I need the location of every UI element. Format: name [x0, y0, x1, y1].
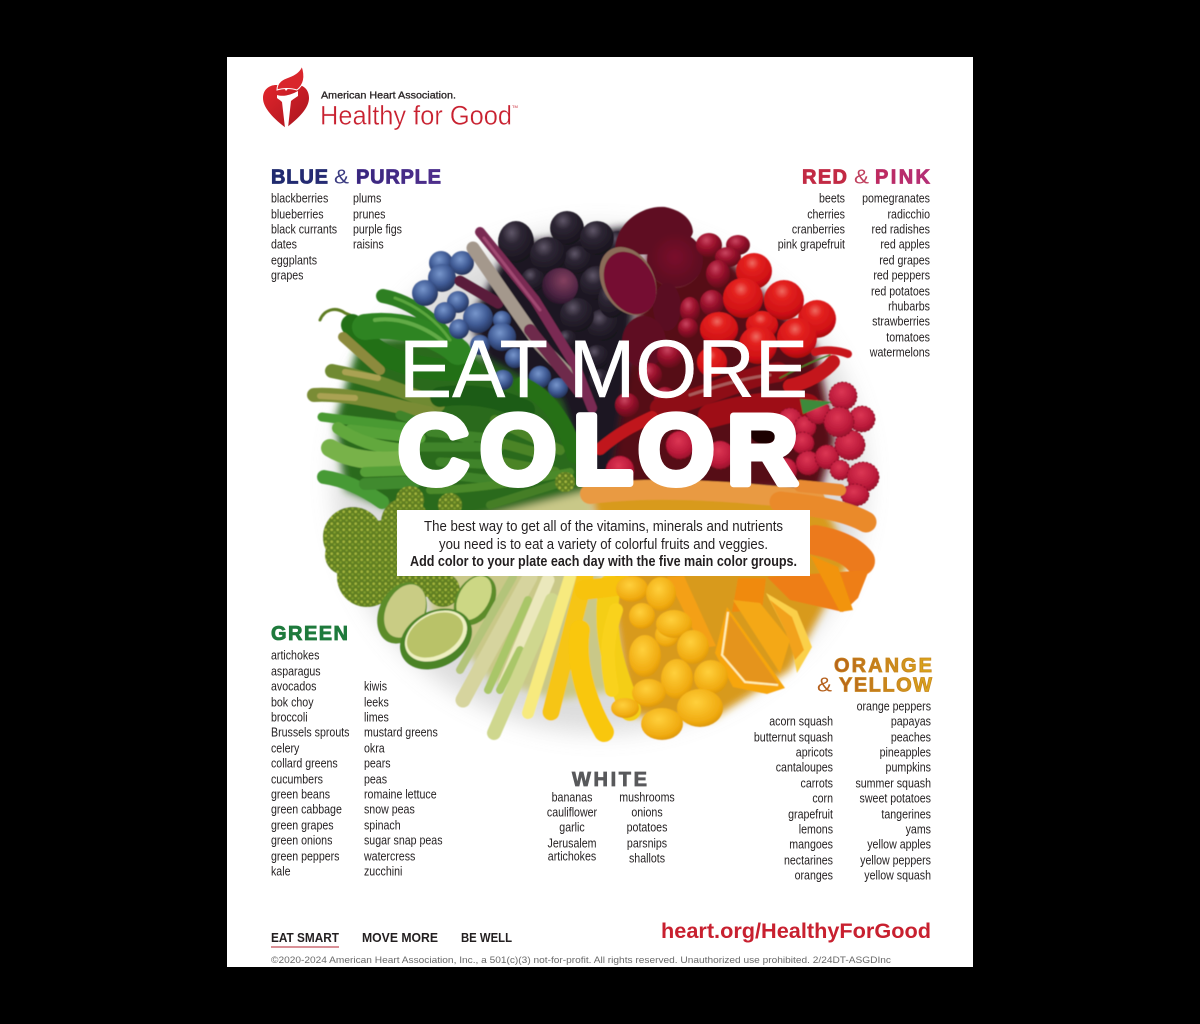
list column 2: sugar snap peas — [364, 834, 443, 848]
logo: American Heart Association Healthy for Good — [263, 66, 518, 130]
list column 1: green grapes — [271, 819, 334, 833]
intro line 2: you need is to eat a variety of colorful fruits and veggies. — [439, 537, 768, 553]
carrots — [590, 486, 866, 561]
list column 2: pumpkins — [886, 761, 931, 775]
panel: green list — [271, 623, 443, 879]
list column 1 — [754, 715, 834, 883]
list column 2: watercress — [363, 850, 416, 864]
list column 2: romaine lettuce — [364, 788, 437, 802]
list column 2: pears — [364, 757, 391, 771]
copyright: ©2020-2024 American Heart Association, Inc., a 501(c)(3) not-for-profit. All rights reserved. Unauthorized use prohibited. 2/24DT-ASGDInc — [271, 955, 891, 966]
panel: blue and purple list — [271, 166, 441, 283]
intro line 3: Add color to your plate each day with the five main color groups. — [410, 554, 797, 570]
list column 1: apricots — [796, 746, 833, 760]
list column 1: green peppers — [271, 850, 340, 864]
list column 2: tomatoes — [886, 331, 930, 345]
list column 1: blueberries — [271, 208, 324, 222]
list column 2: red potatoes — [871, 285, 930, 299]
list column 1: cranberries — [792, 223, 845, 237]
list column 2: tangerines — [881, 808, 931, 822]
list column 2: potatoes — [627, 821, 668, 835]
heading: PINK — [875, 166, 931, 188]
list column 2: spinach — [364, 819, 401, 833]
list column 2: leeks — [364, 696, 389, 710]
footer nav: eat smart: EAT SMART — [271, 931, 339, 945]
footer nav: be well: BE WELL — [461, 931, 512, 945]
raspberry leaf — [800, 399, 832, 414]
dark base colours — [335, 225, 850, 720]
heading: & — [817, 674, 833, 696]
list column 1 — [271, 649, 350, 879]
footer — [271, 920, 931, 966]
panel: white list — [547, 769, 675, 866]
dark gap behind the R — [750, 422, 778, 444]
active underline — [271, 946, 339, 948]
list column 1: green beans — [271, 788, 330, 802]
list column 2: okra — [364, 742, 385, 756]
list column 2: rhubarbs — [888, 300, 930, 314]
cherries and cranberries — [615, 233, 750, 417]
list column 1: cucumbers — [271, 773, 323, 787]
heading: WHITE — [572, 769, 647, 791]
list column 1: cauliflower — [547, 806, 597, 820]
green beans and snap peas — [322, 385, 575, 505]
list column 1: artichokes — [548, 850, 596, 864]
list column 1: broccoli — [271, 711, 308, 725]
list column 1: artichokes — [271, 649, 320, 663]
list column 2: red peppers — [873, 269, 930, 283]
purple plum accent — [542, 268, 578, 304]
list column 2: peaches — [891, 731, 931, 745]
heading: ORANGE — [834, 655, 932, 677]
list column 1: mangoes — [789, 838, 833, 852]
list column 2: orange peppers — [857, 700, 931, 714]
title line 2: COLOR — [398, 394, 798, 504]
list column 1: celery — [271, 742, 300, 756]
list column 1: asparagus — [271, 665, 321, 679]
list column 2: zucchini — [364, 865, 402, 879]
list column 1: garlic — [559, 821, 585, 835]
list column 2: summer squash — [855, 777, 931, 791]
list column 1: green onions — [271, 834, 333, 848]
list column 1: pink grapefruit — [778, 238, 846, 252]
list column 1: nectarines — [784, 854, 833, 868]
list column 2: mushrooms — [619, 791, 675, 805]
list column 2: yellow apples — [867, 838, 931, 852]
footer nav: move more: MOVE MORE — [362, 931, 438, 945]
heading — [817, 655, 932, 696]
list column 1: Jerusalem — [548, 837, 596, 851]
leeks and yellow bean sticks — [460, 577, 630, 733]
website url: heart.org/HealthyForGood — [661, 920, 931, 943]
list column 1: grapes — [271, 269, 304, 283]
list column 2: red apples — [880, 238, 930, 252]
heading: & — [334, 166, 350, 188]
list column 2: raisins — [353, 238, 384, 252]
plums — [498, 211, 632, 391]
oranges — [667, 576, 812, 694]
list column 2: yellow peppers — [860, 854, 931, 868]
intro text box — [397, 510, 810, 576]
list column 1: eggplants — [271, 254, 317, 268]
list column 2 — [862, 192, 930, 360]
food color wheel illustration — [314, 207, 879, 740]
list column 1: black currants — [271, 223, 337, 237]
heading — [802, 166, 931, 188]
list column 2: mustard greens — [364, 726, 438, 740]
list column 2: prunes — [353, 208, 386, 222]
list column 1: kale — [271, 865, 290, 879]
list column 2: radicchio — [887, 208, 930, 222]
heading: & — [854, 166, 870, 188]
list column 2 — [855, 700, 931, 883]
list column 1: avocados — [271, 680, 317, 694]
tomatoes — [697, 253, 836, 377]
list column 2 — [353, 192, 402, 252]
list column 2: yellow squash — [864, 869, 931, 883]
list column 1: cherries — [807, 208, 845, 222]
list column 2: pineapples — [880, 746, 931, 760]
list column 1: blackberries — [271, 192, 328, 206]
list column 1: Brussels sprouts — [271, 726, 350, 740]
list column 1: green cabbage — [271, 803, 342, 817]
list column 1 — [778, 192, 846, 252]
brand name: Healthy for Good — [320, 100, 512, 130]
icon: heart and torch — [263, 66, 309, 128]
list column 1: lemons — [799, 823, 833, 837]
heading: YELLOW — [839, 674, 932, 696]
heading — [271, 166, 441, 188]
list column 2 — [619, 791, 675, 866]
list column 1: bananas — [552, 791, 593, 805]
limes — [368, 567, 505, 682]
list column 2: parsnips — [627, 837, 667, 851]
list column 2: snow peas — [364, 803, 415, 817]
list column 2: shallots — [629, 852, 665, 866]
page background — [227, 57, 973, 967]
list column 1: grapefruit — [788, 808, 834, 822]
heading: RED — [802, 166, 847, 188]
list column 1 — [547, 791, 597, 864]
list column 2: red grapes — [879, 254, 930, 268]
list column 2: limes — [364, 711, 389, 725]
list column 2: kiwis — [364, 680, 387, 694]
heading: BLUE — [271, 166, 328, 188]
list column 1: acorn squash — [769, 715, 833, 729]
heading: PURPLE — [356, 166, 441, 188]
red peppers — [600, 350, 848, 449]
blueberries — [412, 251, 568, 398]
list column 1: cantaloupes — [776, 761, 833, 775]
list column 2: pomegranates — [862, 192, 930, 206]
intro line 1: The best way to get all of the vitamins, minerals and nutrients — [424, 519, 783, 535]
list column 1: carrots — [801, 777, 833, 791]
list column 1 — [271, 192, 337, 283]
list column 2: sweet potatoes — [860, 792, 931, 806]
list column 2: strawberries — [872, 315, 930, 329]
list column 2: plums — [353, 192, 382, 206]
kumquats — [611, 576, 728, 740]
list column 1: oranges — [795, 869, 833, 883]
list column 1: beets — [819, 192, 845, 206]
list column 1: collard greens — [271, 757, 338, 771]
broccoli — [323, 472, 575, 610]
list column 2: onions — [631, 806, 663, 820]
title line 1: EAT MORE — [399, 324, 808, 415]
asparagus — [314, 337, 438, 413]
list column 2: watermelons — [869, 346, 930, 360]
heading: GREEN — [271, 623, 348, 645]
organization name: American Heart Association. — [321, 90, 456, 102]
panel: orange and yellow list — [754, 655, 932, 883]
soft shadow — [335, 228, 865, 732]
list column 1: corn — [812, 792, 833, 806]
list column 2 — [363, 680, 443, 879]
list column 1: butternut squash — [754, 731, 833, 745]
list column 2: red radishes — [872, 223, 930, 237]
yellow pepper strips — [579, 610, 616, 732]
list column 1: dates — [271, 238, 297, 252]
green peppers — [320, 296, 470, 370]
list column 2: purple figs — [353, 223, 402, 237]
list column 1: bok choy — [271, 696, 314, 710]
beets — [588, 207, 703, 368]
purple carrots — [460, 232, 592, 408]
title: EAT MORE COLOR — [398, 324, 808, 504]
trademark: TM — [512, 104, 518, 109]
panel: red and pink list — [778, 166, 931, 360]
raspberries — [606, 382, 879, 506]
list column 2: papayas — [891, 715, 931, 729]
list column 2: yams — [906, 823, 931, 837]
list column 2: peas — [364, 773, 387, 787]
orange peppers — [732, 555, 869, 612]
